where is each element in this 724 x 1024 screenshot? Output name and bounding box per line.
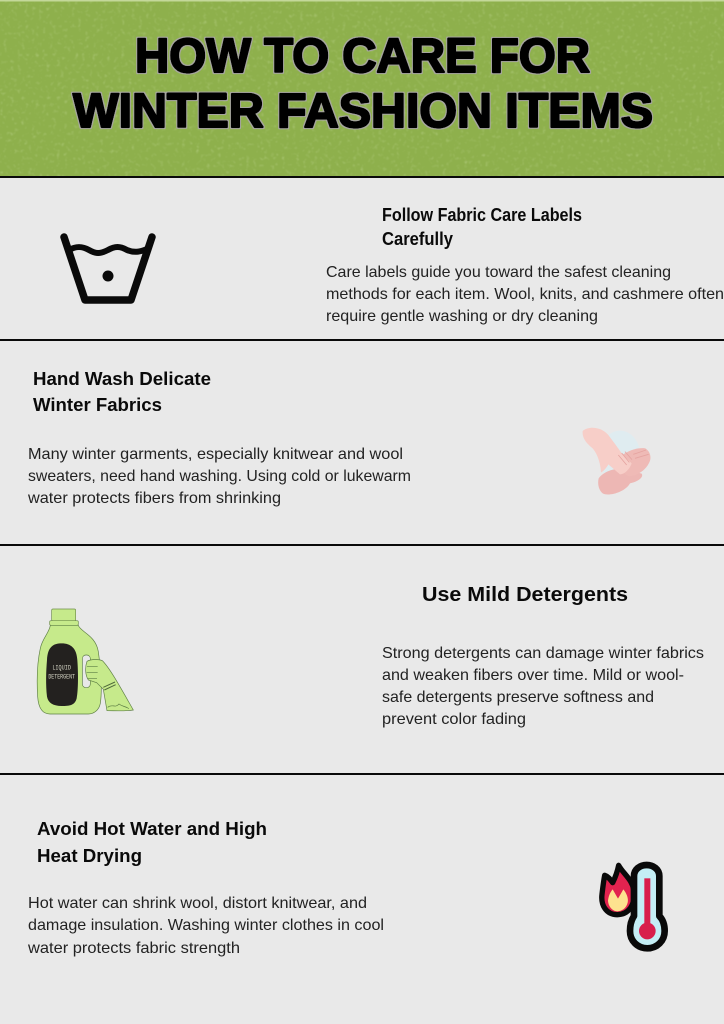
title bbox=[73, 30, 653, 138]
text block: hand washing bbox=[27, 446, 411, 507]
icon: washing hands bbox=[583, 428, 650, 494]
text block: detergents: prevent color fading bbox=[382, 711, 526, 728]
panel: use mild detergents bbox=[37, 584, 704, 728]
heading: follow fabric care labels bbox=[382, 205, 582, 249]
icon: flame and thermometer bbox=[602, 865, 665, 948]
text block: hand washing: Many winter garments, especially knitwear and wool bbox=[28, 446, 403, 463]
label text on bottle: LIQUID bbox=[52, 665, 71, 672]
heading: avoid hot water and high heat drying bbox=[37, 819, 267, 866]
text block: care labels bbox=[326, 264, 724, 325]
title: WINTER FASHION ITEMS bbox=[73, 85, 653, 138]
header banner bbox=[0, 0, 724, 177]
text block: hot water: damage insulation. Washing winter clothes in cool bbox=[28, 917, 384, 934]
heading: hand wash delicate winter fabrics bbox=[33, 369, 211, 415]
heading: follow fabric care labels: Carefully bbox=[382, 229, 453, 249]
text block: care labels: methods for each item. Wool, knits, and cashmere often bbox=[326, 286, 724, 303]
text block: care labels: require gentle washing or dry cleaning bbox=[326, 308, 598, 325]
text block: detergents: Strong detergents can damage winter fabrics bbox=[382, 645, 704, 662]
heading: avoid hot water and high heat drying: Heat Drying bbox=[37, 846, 142, 866]
text block: hand washing: water protects fibers from shrinking bbox=[27, 490, 281, 507]
icon: liquid detergent bottle bbox=[37, 609, 133, 714]
text block: detergents: and weaken fibers over time. Mild or wool- bbox=[382, 667, 684, 684]
heading: use mild detergents: Use Mild Detergents bbox=[422, 584, 628, 606]
heading: follow fabric care labels: Follow Fabric Care Labels bbox=[382, 205, 582, 225]
text block: hot water: Hot water can shrink wool, distort knitwear, and bbox=[28, 895, 367, 912]
text block: hot water: water protects fabric strength bbox=[27, 940, 240, 957]
heading: avoid hot water and high heat drying: Avoid Hot Water and High bbox=[37, 819, 267, 839]
text block: hot water bbox=[27, 895, 384, 957]
heading: hand wash delicate winter fabrics: Hand Wash Delicate bbox=[33, 369, 211, 389]
label text on bottle bbox=[48, 665, 75, 680]
text block: detergents: safe detergents preserve softness and bbox=[382, 689, 654, 706]
panel: avoid hot water and high heat bbox=[27, 819, 665, 957]
heading: hand wash delicate winter fabrics: Winter Fabrics bbox=[33, 395, 162, 415]
icon: wash tub care symbol bbox=[64, 237, 152, 300]
title: HOW TO CARE FOR bbox=[135, 30, 590, 83]
text block: care labels: Care labels guide you toward the safest cleaning bbox=[326, 264, 671, 281]
panel: hand wash delicate fabrics bbox=[27, 369, 650, 507]
label text on bottle: DETERGENT bbox=[48, 673, 75, 680]
panel: follow fabric care labels bbox=[64, 205, 724, 325]
text block: hand washing: sweaters, need hand washing. Using cold or lukewarm bbox=[28, 468, 411, 485]
text block: detergents bbox=[382, 645, 704, 728]
